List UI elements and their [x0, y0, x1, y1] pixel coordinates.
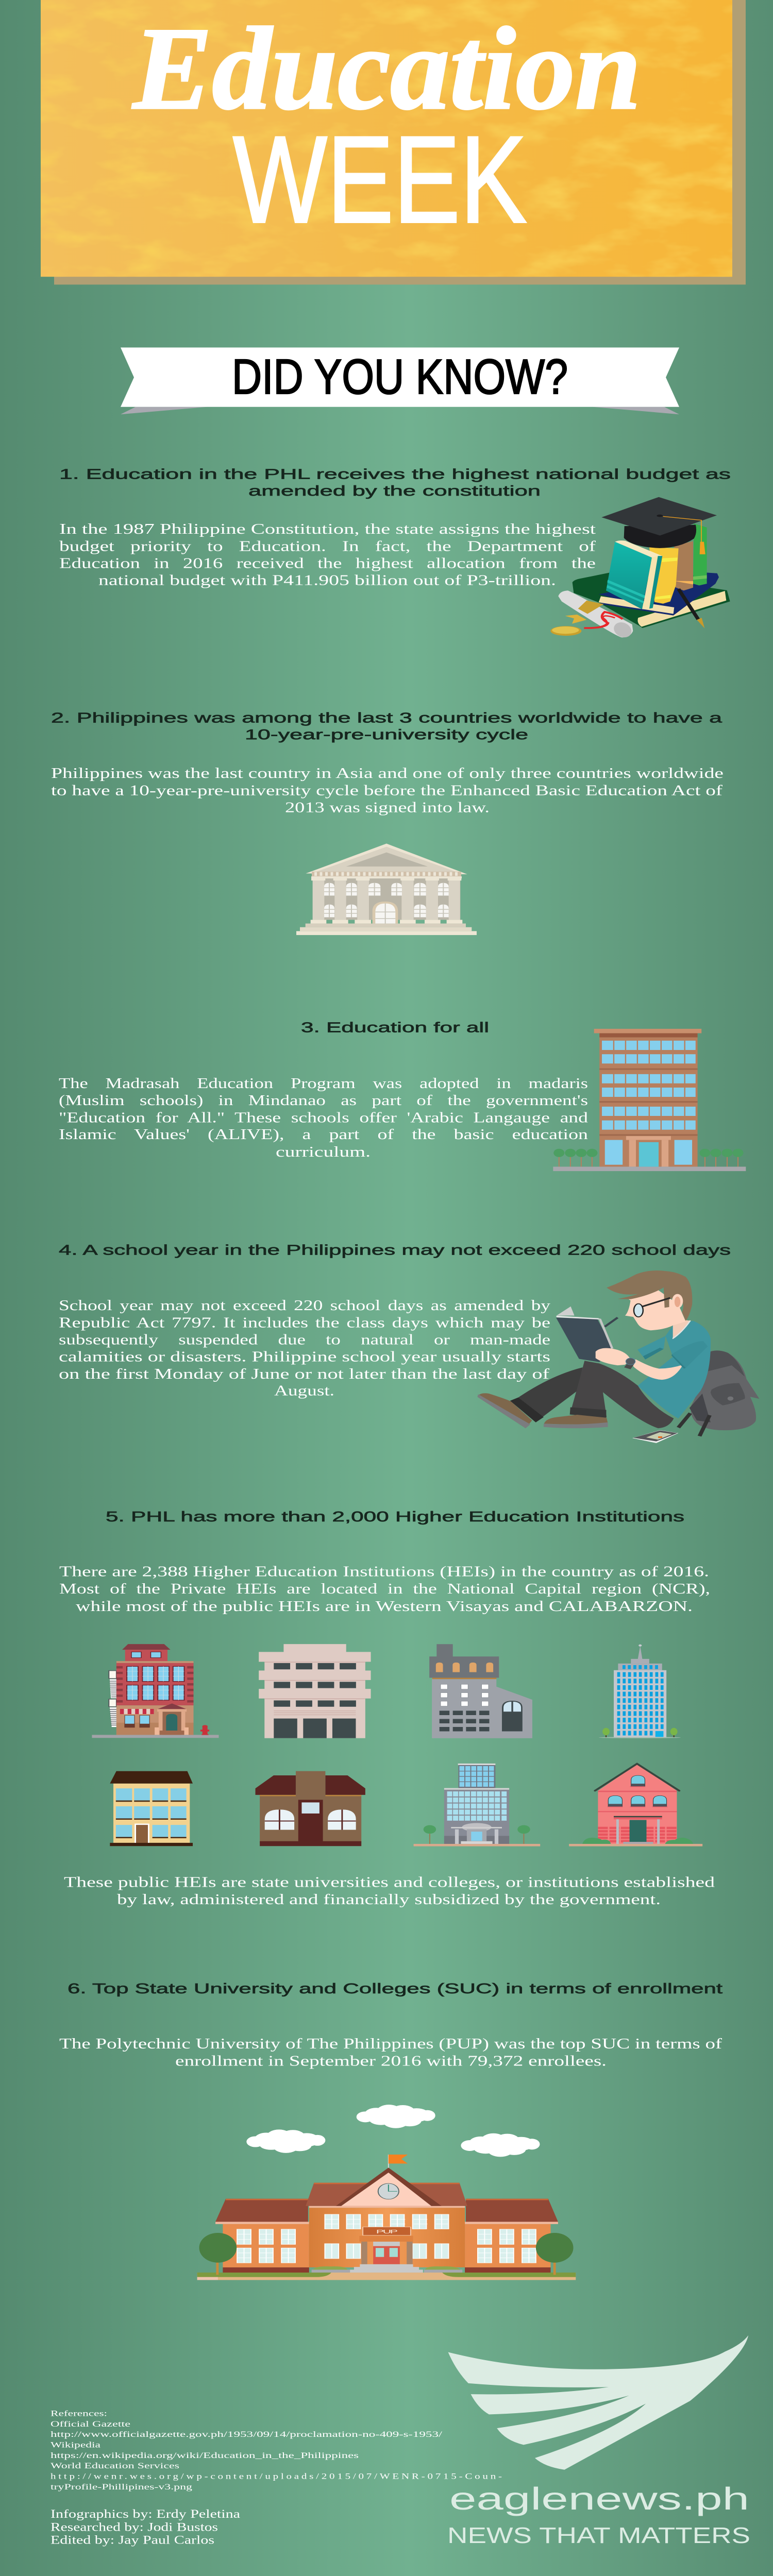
references: https://en.wikipedia.org/wiki/Education_in_the_Philippines — [51, 2451, 359, 2460]
section 1 — [59, 466, 731, 640]
icon: eagle wing — [448, 2335, 748, 2470]
body text 2: to have a 10-year-pre-university cycle before the Enhanced Basic Education Act of — [51, 783, 722, 799]
section 6 — [59, 1980, 722, 2280]
icon: red brick building — [92, 1644, 219, 1738]
heading 6: 6. Top State University and Colleges (SUC) in terms of enrollment — [68, 1980, 722, 1996]
school building — [197, 2167, 576, 2280]
heading 2 — [51, 710, 722, 742]
panel shadow — [54, 0, 746, 284]
icon: pink house — [569, 1764, 702, 1846]
panel texture — [41, 0, 732, 277]
heading 5: 5. PHL has more than 2,000 Higher Education Institutions — [106, 1509, 684, 1524]
flag — [389, 2155, 408, 2169]
icon: tall school building — [553, 1029, 746, 1171]
references: tryProfile-Phillipines-v3.png — [51, 2482, 192, 2492]
body text 3 — [59, 1076, 589, 1160]
logo: eaglenews.ph — [447, 2335, 750, 2548]
body text 3: (Muslim schools) in Mindanao as part of the government's — [59, 1093, 588, 1109]
icon: brown house — [256, 1771, 365, 1846]
heading 3: 3. Education for all — [301, 1020, 489, 1036]
heading 4: 4. A school year in the Philippines may not exceed 220 school days — [59, 1242, 731, 1258]
body text 2: 2013 was signed into law. — [285, 800, 490, 816]
sign text: PUP — [376, 2229, 398, 2235]
heading 1: 1. Education in the PHL receives the highest national budget as — [59, 466, 731, 482]
body text 4 — [59, 1298, 551, 1399]
trees — [199, 2233, 574, 2275]
body text 5b: by law, administered and financially subsidized by the government. — [117, 1892, 661, 1908]
body text 1: budget priority to Education. In fact, the Department of — [59, 539, 596, 555]
icon: student reading with backpack — [477, 1270, 760, 1443]
credits — [51, 2507, 240, 2547]
heading 1: amended by the constitution — [248, 483, 541, 499]
body text 4: School year may not exceed 220 school days as amended by — [59, 1298, 551, 1314]
logo tagline: NEWS THAT MATTERS — [447, 2522, 750, 2548]
references — [51, 2409, 502, 2492]
body text 6: enrollment in September 2016 with 79,372 enrollees. — [175, 2054, 607, 2069]
icon: classical building — [296, 843, 477, 935]
references: http://www.officialgazette.gov.ph/1953/09/14/proclamation-no-409-s-1953/ — [51, 2430, 443, 2439]
section 3 — [59, 1020, 746, 1171]
body text 1: In the 1987 Philippine Constitution, the state assigns the highest — [59, 521, 596, 537]
body text 1: national budget with P411.905 billion out of P3-trillion. — [98, 572, 556, 588]
title panel — [41, 0, 746, 284]
icon: skyscraper — [599, 1645, 681, 1738]
body text 5: while most of the public HEIs are in Western Visayas and CALABARZON. — [76, 1599, 693, 1615]
body text 4: subsequently suspended due to natural or man-made — [59, 1332, 550, 1348]
body text 6: The Polytechnic University of The Philippines (PUP) was the top SUC in terms of — [59, 2036, 722, 2052]
section 2 — [51, 710, 724, 935]
references: http://wenr.wes.org/wp-content/uploads/2015/07/WENR-0715-Coun- — [51, 2472, 502, 2481]
body text 4: Republic Act 7797. It includes the class days which may be — [59, 1315, 550, 1331]
credits: Researched by: Jodi Bustos — [51, 2520, 218, 2533]
body text 3: "Education for All." These schools offer 'Arabic Langauge and — [59, 1110, 589, 1126]
body text 1 — [59, 521, 596, 588]
body text 5 — [59, 1564, 710, 1615]
body text 5b: These public HEIs are state universities and colleges, or institutions established — [64, 1874, 715, 1890]
heading 2: 10-year-pre-university cycle — [245, 726, 528, 742]
body text 3: curriculum. — [276, 1144, 371, 1160]
icon: clouds — [246, 2105, 540, 2157]
icon: grey building — [429, 1644, 532, 1738]
heading 1 — [59, 466, 731, 499]
references: References: — [51, 2409, 107, 2418]
references: Wikipedia — [51, 2441, 101, 2450]
body text 5b — [64, 1874, 715, 1908]
section 5 — [59, 1509, 715, 1908]
illustration: clouds and PUP school building — [197, 2105, 576, 2280]
body text 4: on the first Monday of June or not later than the last day of — [59, 1366, 549, 1382]
body text 1: Education in 2016 received the highest allocation from the — [59, 556, 596, 571]
icon: graduation cap, books and diploma — [550, 497, 730, 640]
body text 2: Philippines was the last country in Asia and one of only three countries worldwide — [51, 766, 724, 782]
body text 5: There are 2,388 Higher Education Institutions (HEIs) in the country as of 2016. — [59, 1564, 709, 1580]
icon: office tower — [414, 1764, 540, 1846]
references: World Education Services — [51, 2461, 179, 2470]
logo wordmark: eaglenews.ph — [449, 2482, 749, 2517]
body text 5: Most of the Private HEIs are located in the National Capital region (NCR), — [59, 1581, 710, 1597]
credits: Infographics by: Erdy Peletina — [51, 2507, 240, 2520]
body text 2 — [51, 766, 724, 816]
references: Official Gazette — [51, 2419, 130, 2429]
ribbon heading: DID YOU KNOW? — [232, 349, 568, 404]
icon: beige building — [259, 1644, 371, 1738]
body text 6 — [59, 2036, 722, 2069]
ribbon: did you know — [121, 348, 679, 414]
credits: Edited by: Jay Paul Carlos — [51, 2533, 214, 2547]
title: WEEK: WEEK — [233, 111, 527, 249]
body text 4: August. — [274, 1383, 334, 1399]
icon: tan apartment — [110, 1771, 193, 1846]
body text 3: The Madrasah Education Program was adopted in madaris — [59, 1076, 588, 1092]
body text 4: calamities or disasters. Philippine school year usually starts — [59, 1349, 550, 1365]
section 4 — [59, 1242, 760, 1443]
heading 2: 2. Philippines was among the last 3 countries worldwide to have a — [51, 710, 722, 725]
body text 3: Islamic Values' (ALIVE), a part of the basic education — [59, 1127, 588, 1143]
